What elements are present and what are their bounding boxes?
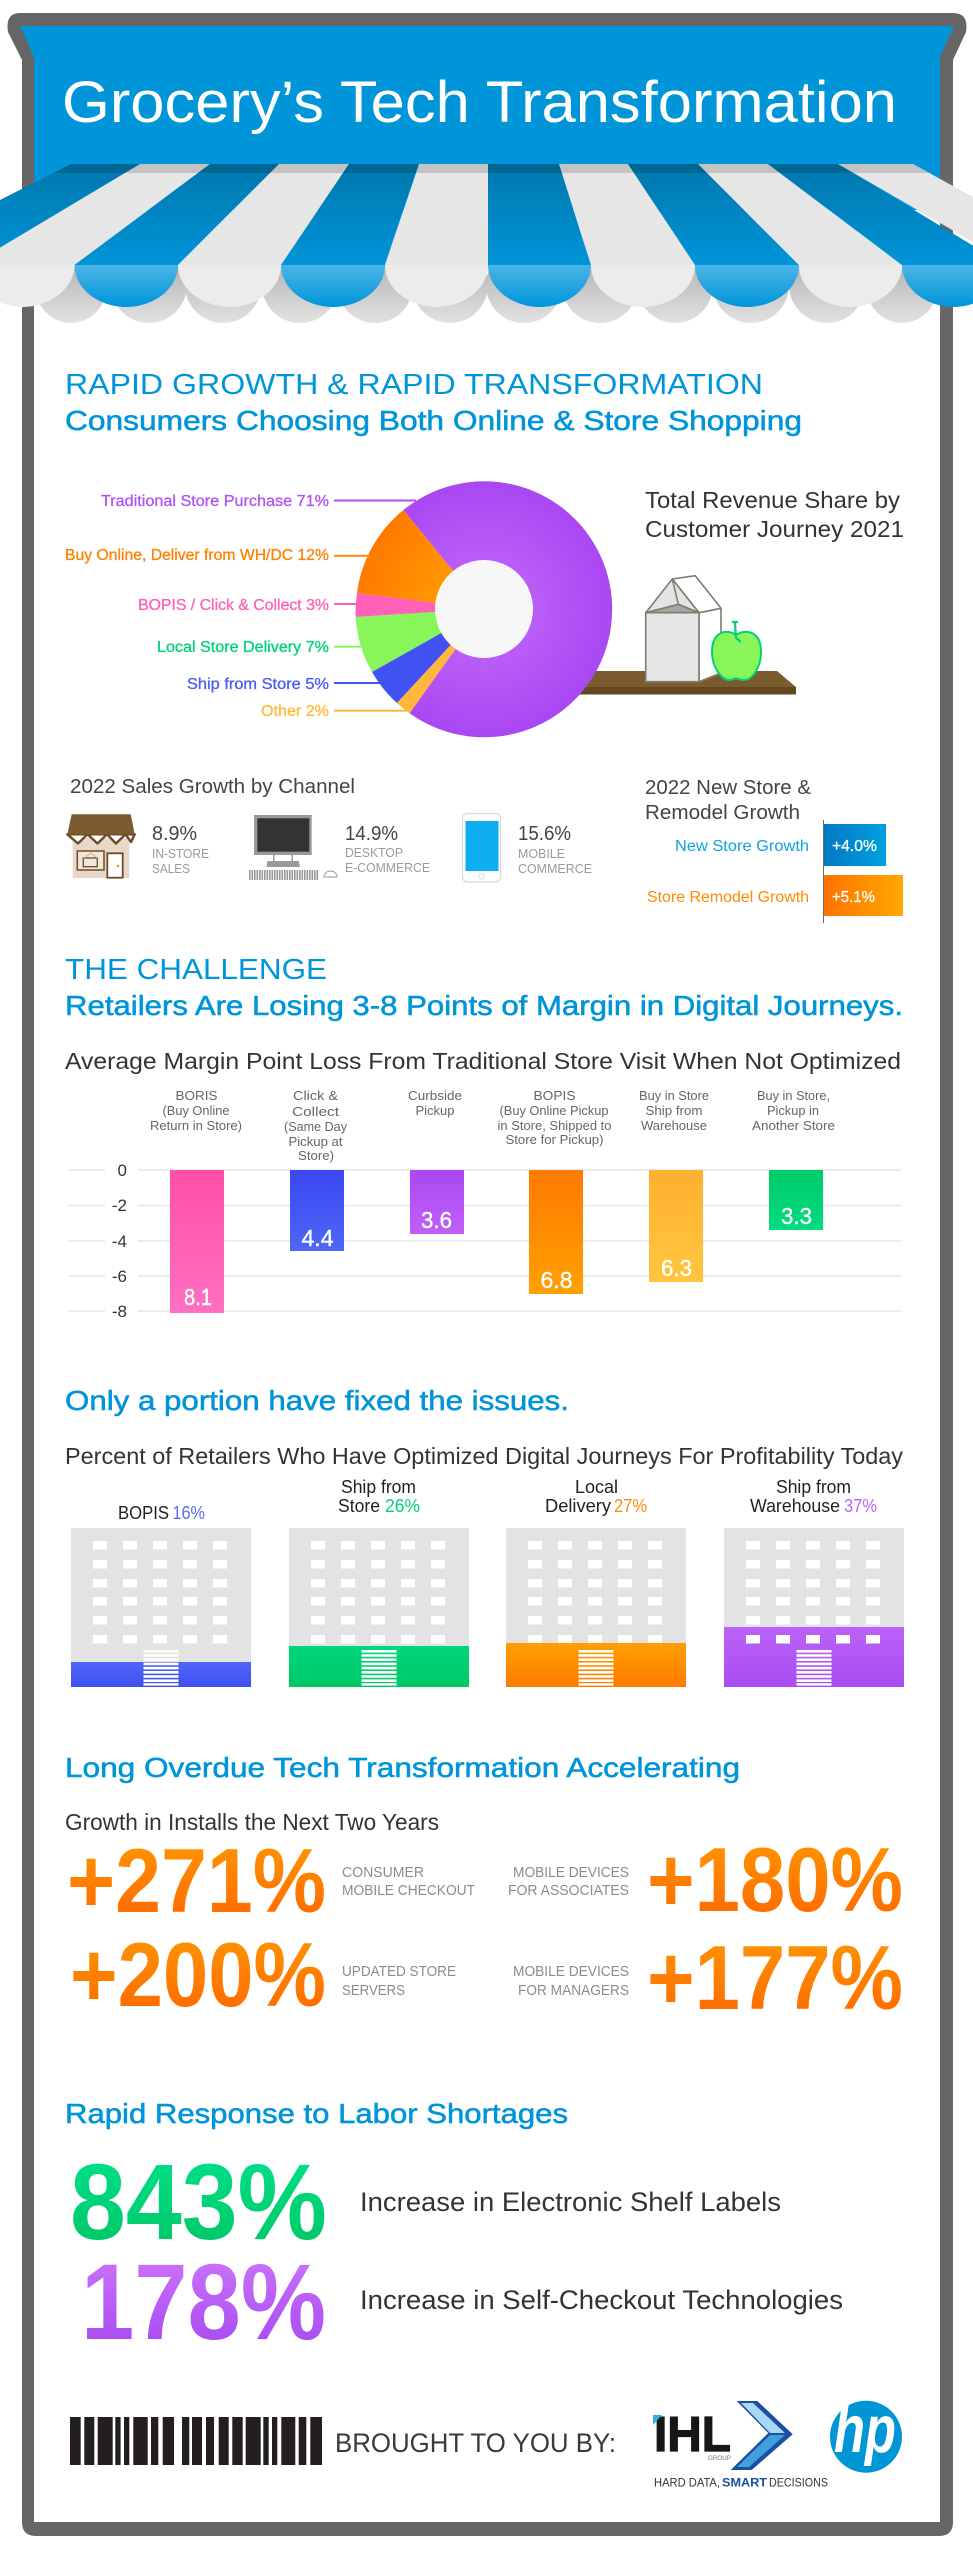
label: buy in store ship from warehouse xyxy=(639,1088,709,1133)
label: buy in store ship from warehouse: Buy in Store xyxy=(639,1088,709,1103)
label: click and collect: Collect xyxy=(292,1104,339,1119)
heading: 2022 Sales Growth by Channel xyxy=(70,776,355,798)
label: curbside xyxy=(408,1088,462,1118)
shelf with milk carton and apple xyxy=(500,576,796,694)
heading: rapid growth: RAPID GROWTH & RAPID TRANSFORMATION xyxy=(65,369,763,401)
label: local store delivery: Local Store Delivery 7% xyxy=(157,639,329,656)
bar: BORIS xyxy=(170,1170,224,1313)
building: local delivery xyxy=(506,1477,686,1687)
stat: mobile commerce: COMMERCE xyxy=(518,861,592,876)
stat: mobile devices for managers xyxy=(513,1928,903,2029)
text: brought to you by: BROUGHT TO YOU BY: xyxy=(335,2428,616,2458)
tagline: DECISIONS xyxy=(769,2478,828,2490)
awning shadow scallops xyxy=(35,247,938,323)
heading: rapid response: Rapid Response to Labor Shortages xyxy=(65,2098,568,2129)
label: buy in store pickup in another store: Pickup in xyxy=(767,1103,819,1118)
bar: pickup in another store xyxy=(769,1170,823,1230)
bar: click and collect: 4.4 xyxy=(302,1225,334,1251)
bar: pickup in another store: 3.3 xyxy=(781,1203,812,1229)
bar: BOPIS xyxy=(529,1170,583,1294)
label: buy online: Buy Online, Deliver from WH/DC 12% xyxy=(65,547,329,564)
wordmark: GROUP xyxy=(708,2455,731,2462)
building: ship from store xyxy=(289,1477,469,1687)
bar: store remodel growth xyxy=(647,875,903,916)
bar: store remodel growth: Store Remodel Growth xyxy=(647,889,809,906)
chart title: Average Margin Point Loss From Traditional Store Visit When Not Optimized xyxy=(65,1048,901,1074)
stat: self-checkout technologies: 178% xyxy=(81,2241,326,2362)
axis labels: -4 xyxy=(112,1232,127,1251)
stat: in-store: IN-STORE xyxy=(152,846,209,861)
building: ship from warehouse: 37% xyxy=(844,1496,877,1516)
icon: store xyxy=(67,814,135,878)
heading: 2022 New Store & xyxy=(645,777,812,799)
stat: desktop e-commerce xyxy=(345,823,430,875)
label: click and collect: Store) xyxy=(298,1148,334,1163)
building: local delivery: Delivery xyxy=(545,1496,611,1516)
stat: self-checkout technologies xyxy=(81,2241,843,2362)
label: click and collect: (Same Day xyxy=(284,1119,347,1134)
label: BOPIS: BOPIS / Click & Collect 3% xyxy=(138,597,329,614)
axis labels: -6 xyxy=(112,1267,127,1286)
bar: curbside: 3.6 xyxy=(421,1207,452,1233)
building: BOPIS: 16% xyxy=(172,1503,205,1523)
label: buy in store ship from warehouse: Ship from xyxy=(646,1103,702,1118)
axis labels: 0 xyxy=(118,1161,127,1180)
heading: rapid growth xyxy=(65,369,802,436)
subheading: growth in installs: Growth in Installs the Next Two Years xyxy=(65,1809,439,1835)
sales growth by channel xyxy=(67,776,592,882)
icon: apple xyxy=(712,622,761,680)
building: local delivery: Local xyxy=(575,1477,618,1497)
building: BOPIS: BOPIS xyxy=(118,1503,169,1523)
stat: mobile devices for associates: +180% xyxy=(647,1830,903,1931)
label: curbside: Pickup xyxy=(416,1103,454,1118)
awning stripes xyxy=(0,164,973,265)
stat: consumer mobile checkout: CONSUMER xyxy=(342,1864,424,1881)
label: BOPIS: BOPIS xyxy=(534,1088,576,1103)
bar: BOPIS: 6.8 xyxy=(540,1267,572,1293)
stat: desktop e-commerce: E-COMMERCE xyxy=(345,860,430,875)
icon: desktop computer xyxy=(249,815,337,877)
heading xyxy=(645,777,812,824)
stat: mobile devices for associates: MOBILE DEVICES xyxy=(513,1864,629,1881)
stat: electronic shelf labels xyxy=(70,2141,781,2262)
icon: phone xyxy=(462,814,500,882)
building: ship from store: 26% xyxy=(385,1496,420,1516)
heading: the challenge: THE CHALLENGE xyxy=(65,954,327,986)
building: ship from warehouse xyxy=(724,1477,904,1687)
heading: rapid growth: Consumers Choosing Both Online & Store Shopping xyxy=(65,405,802,436)
bar: ship from warehouse: 6.3 xyxy=(661,1255,692,1281)
label: BOPIS xyxy=(498,1088,612,1147)
stat: electronic shelf labels: Increase in Electronic Shelf Labels xyxy=(360,2187,781,2217)
stat: consumer mobile checkout: MOBILE CHECKOUT xyxy=(342,1882,475,1899)
bar: new store growth: +4.0% xyxy=(832,838,877,855)
tagline: HARD DATA, xyxy=(654,2478,720,2490)
building: ship from warehouse: Ship from xyxy=(776,1477,851,1497)
logo: HP: hp xyxy=(834,2392,896,2467)
tagline xyxy=(654,2478,828,2490)
pie title: Total Revenue Share by xyxy=(645,487,900,513)
heading: the challenge xyxy=(65,954,903,1021)
label: ship from store: Ship from Store 5% xyxy=(187,676,329,693)
stat: desktop e-commerce: 14.9% xyxy=(345,823,398,845)
bar: new store growth xyxy=(675,824,886,866)
stat: mobile devices for associates: FOR ASSOCIATES xyxy=(508,1882,629,1899)
stat: in-store: 8.9% xyxy=(152,823,197,845)
label: click and collect xyxy=(284,1088,347,1163)
bar: click and collect xyxy=(290,1170,344,1251)
building: local delivery: 27% xyxy=(614,1496,647,1516)
stat: self-checkout technologies: Increase in Self-Checkout Technologies xyxy=(360,2285,843,2315)
bar: new store growth: New Store Growth xyxy=(675,838,809,855)
stat: mobile commerce: MOBILE xyxy=(518,846,565,861)
label: click and collect: Pickup at xyxy=(288,1134,343,1149)
label: click and collect: Click & xyxy=(293,1088,338,1103)
stat: mobile devices for associates xyxy=(508,1830,903,1931)
pie chart: revenue share xyxy=(356,481,612,737)
stat: updated store servers: +200% xyxy=(70,1925,326,2026)
stat: consumer mobile checkout: +271% xyxy=(67,1831,326,1932)
bar: ship from warehouse xyxy=(649,1170,703,1282)
label: BOPIS: Store for Pickup) xyxy=(506,1132,604,1147)
stat: mobile commerce: 15.6% xyxy=(518,823,571,845)
logo: IHL Group xyxy=(653,2401,828,2490)
pie title: Customer Journey 2021 xyxy=(645,516,904,542)
pie title xyxy=(645,487,904,542)
title: Grocery’s Tech Transformation xyxy=(62,70,897,135)
label: curbside: Curbside xyxy=(408,1088,462,1103)
label: BORIS: Return in Store) xyxy=(150,1118,242,1133)
bar: curbside xyxy=(410,1170,464,1234)
label: buy in store ship from warehouse: Warehouse xyxy=(641,1118,707,1133)
stat: electronic shelf labels: 843% xyxy=(70,2141,327,2262)
bar: store remodel growth: +5.1% xyxy=(832,889,875,906)
building: BOPIS xyxy=(71,1503,251,1687)
label: buy in store pickup in another store xyxy=(752,1088,835,1133)
icon: milk carton xyxy=(646,576,721,682)
building: ship from store: Store xyxy=(338,1496,380,1516)
heading: only a portion: Only a portion have fixed the issues. xyxy=(65,1385,569,1416)
wordmark: IHL xyxy=(654,2408,731,2462)
stat: mobile devices for managers: +177% xyxy=(647,1928,903,2029)
tagline: SMART xyxy=(722,2478,767,2490)
heading: long overdue: Long Overdue Tech Transformation Accelerating xyxy=(65,1752,740,1783)
awning xyxy=(0,164,973,323)
subheading: percent of retailers: Percent of Retailers Who Have Optimized Digital Journeys For Profitability Today xyxy=(65,1443,903,1469)
bar: BORIS: 8.1 xyxy=(184,1284,212,1310)
label: traditional: Traditional Store Purchase 71% xyxy=(101,493,329,510)
label: BOPIS: in Store, Shipped to xyxy=(498,1118,612,1133)
label: BOPIS: (Buy Online Pickup xyxy=(500,1103,608,1118)
heading: Remodel Growth xyxy=(645,802,800,824)
awning scallops xyxy=(0,265,973,307)
chevron xyxy=(731,2401,793,2470)
label: BORIS xyxy=(150,1088,242,1133)
icon: barcode xyxy=(70,2417,322,2465)
axis labels xyxy=(112,1161,127,1321)
stat: in-store xyxy=(152,823,209,876)
stat: updated store servers: UPDATED STORE xyxy=(342,1963,456,1980)
stat: mobile commerce xyxy=(518,823,592,876)
column labels xyxy=(150,1088,835,1163)
axis labels: -2 xyxy=(112,1196,127,1215)
stat: mobile devices for managers: FOR MANAGERS xyxy=(518,1982,629,1999)
shelf xyxy=(500,671,796,694)
header banner xyxy=(20,26,954,210)
building: ship from store: Ship from xyxy=(341,1477,416,1497)
label: buy in store pickup in another store: Another Store xyxy=(752,1118,835,1133)
stat: updated store servers: SERVERS xyxy=(342,1982,405,1999)
stat: desktop e-commerce: DESKTOP xyxy=(345,845,403,860)
axis labels: -8 xyxy=(112,1302,127,1321)
pie labels xyxy=(65,493,416,720)
label: other: Other 2% xyxy=(261,703,329,720)
stat: mobile devices for managers: MOBILE DEVICES xyxy=(513,1963,629,1980)
stat: in-store: SALES xyxy=(152,861,190,876)
new store and remodel growth xyxy=(645,777,903,923)
bar chart: margin loss xyxy=(68,1161,901,1321)
heading: the challenge: Retailers Are Losing 3-8 Points of Margin in Digital Journeys. xyxy=(65,990,903,1021)
label: buy in store pickup in another store: Buy in Store, xyxy=(757,1088,830,1103)
label: BORIS: BORIS xyxy=(176,1088,218,1103)
building: ship from warehouse: Warehouse xyxy=(750,1496,840,1516)
label: BORIS: (Buy Online xyxy=(162,1103,230,1118)
